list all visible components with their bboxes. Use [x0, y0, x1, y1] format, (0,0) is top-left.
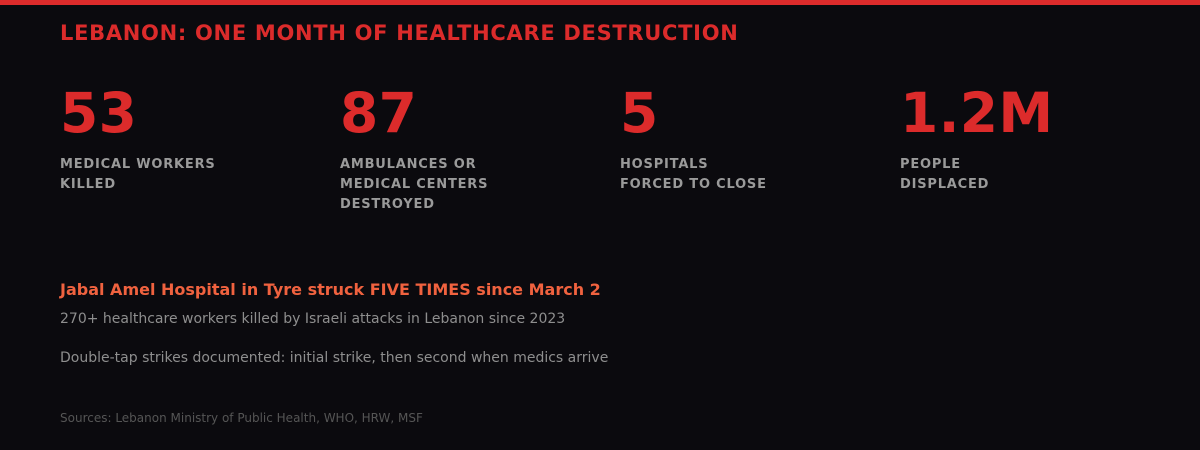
stat: medical workers: MEDICAL WORKERS — [60, 157, 216, 172]
stat: hospitals: FORCED TO CLOSE — [620, 177, 767, 192]
stat: medical workers: 53 — [60, 81, 137, 145]
stat: ambulances: MEDICAL CENTERS — [340, 177, 488, 192]
stat: displaced — [900, 81, 1053, 192]
stat: hospitals — [620, 81, 767, 192]
stat: hospitals: HOSPITALS — [620, 157, 708, 172]
stat: ambulances: 87 — [340, 81, 417, 145]
fact 1: 270+ healthcare workers killed by Israeli attacks in Lebanon since 2023 — [60, 311, 565, 327]
stat: displaced: DISPLACED — [900, 177, 989, 192]
top bar — [0, 0, 1200, 5]
stat: ambulances: AMBULANCES OR — [340, 157, 476, 172]
stat: ambulances — [340, 81, 488, 212]
stat: medical workers — [60, 81, 216, 192]
stat: hospitals: 5 — [620, 81, 659, 145]
sources: Sources: Lebanon Ministry of Public Health, WHO, HRW, MSF — [60, 411, 423, 425]
stat: ambulances: DESTROYED — [340, 197, 435, 212]
stat: displaced: 1.2M — [900, 81, 1053, 145]
fact 2: Double-tap strikes documented: initial strike, then second when medics arrive — [60, 350, 608, 366]
stat: medical workers: KILLED — [60, 177, 116, 192]
highlight text: Jabal Amel Hospital in Tyre struck FIVE TIMES since March 2 — [60, 280, 601, 299]
stat: displaced: PEOPLE — [900, 157, 961, 172]
title: LEBANON: ONE MONTH OF HEALTHCARE DESTRUCTION — [60, 21, 739, 45]
